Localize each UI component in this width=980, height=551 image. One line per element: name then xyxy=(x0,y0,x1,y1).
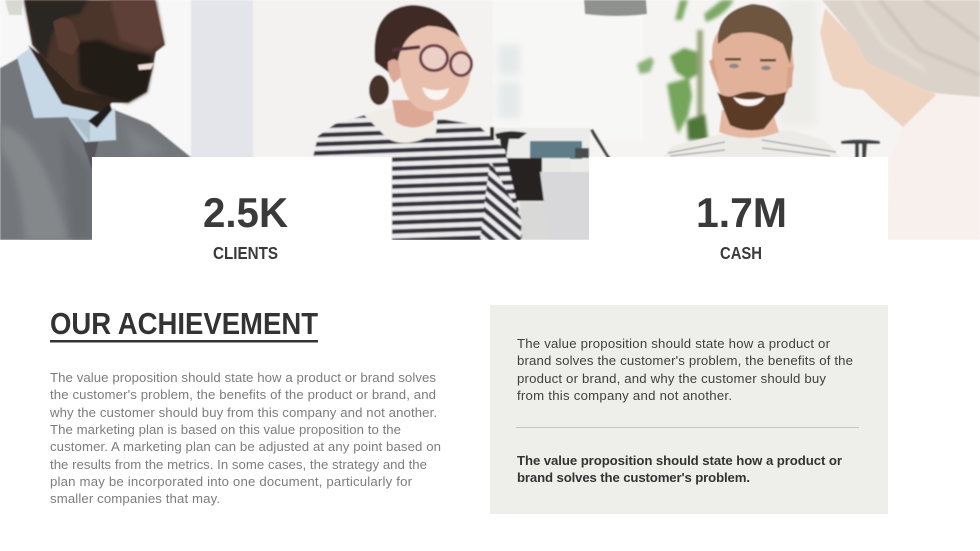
stat card: cash xyxy=(589,157,888,265)
body paragraph: The marketing plan is based on this value proposition to the xyxy=(50,422,401,437)
body paragraph: plan may be incorporated into one document, particularly for xyxy=(50,474,413,489)
panel bold text: The value proposition should state how a product or xyxy=(517,453,842,468)
lamp left xyxy=(5,0,22,15)
plant xyxy=(637,0,734,140)
body paragraph: customer. A marketing plan can be adjusted at any point based on xyxy=(50,439,441,454)
person: bearded man xyxy=(663,4,840,157)
value: 1.7M: 1.7M xyxy=(696,189,787,236)
panel bold text xyxy=(517,453,842,485)
photo: four colleagues smiling in an office xyxy=(0,0,980,240)
body paragraph: why the customer should buy from this company and not another. xyxy=(49,405,437,420)
body paragraph: smaller companies that may. xyxy=(50,491,220,506)
body paragraph: the results from the metrics. In some cases, the strategy and the xyxy=(50,457,427,472)
body paragraph: The value proposition should state how a product or brand solves xyxy=(50,370,436,385)
panel: value proposition xyxy=(490,305,888,514)
heading: our achievement: OUR ACHIEVEMENT xyxy=(50,306,318,341)
person: blonde woman on the right xyxy=(820,0,980,128)
body paragraph: the customer's problem, the benefits of the product or brand, and xyxy=(50,387,436,402)
panel text xyxy=(517,336,853,403)
lamp centre xyxy=(584,0,647,16)
office background furniture xyxy=(494,128,590,206)
label: clients: CLIENTS xyxy=(213,243,278,263)
panel text: product or brand, and why the customer should buy xyxy=(517,371,826,386)
person: man on the left xyxy=(0,0,192,240)
panel text: from this company and not another. xyxy=(517,388,732,403)
stat card: clients xyxy=(92,157,391,265)
panel bold text: brand solves the customer's problem. xyxy=(517,470,750,485)
body paragraph xyxy=(49,370,441,506)
panel text: brand solves the customer's problem, the benefits of the xyxy=(517,353,853,368)
panel text: The value proposition should state how a product or xyxy=(517,336,831,351)
label: cash: CASH xyxy=(720,243,762,263)
value: 2.5K: 2.5K xyxy=(203,189,288,236)
person: woman in the striped shirt xyxy=(313,5,522,240)
